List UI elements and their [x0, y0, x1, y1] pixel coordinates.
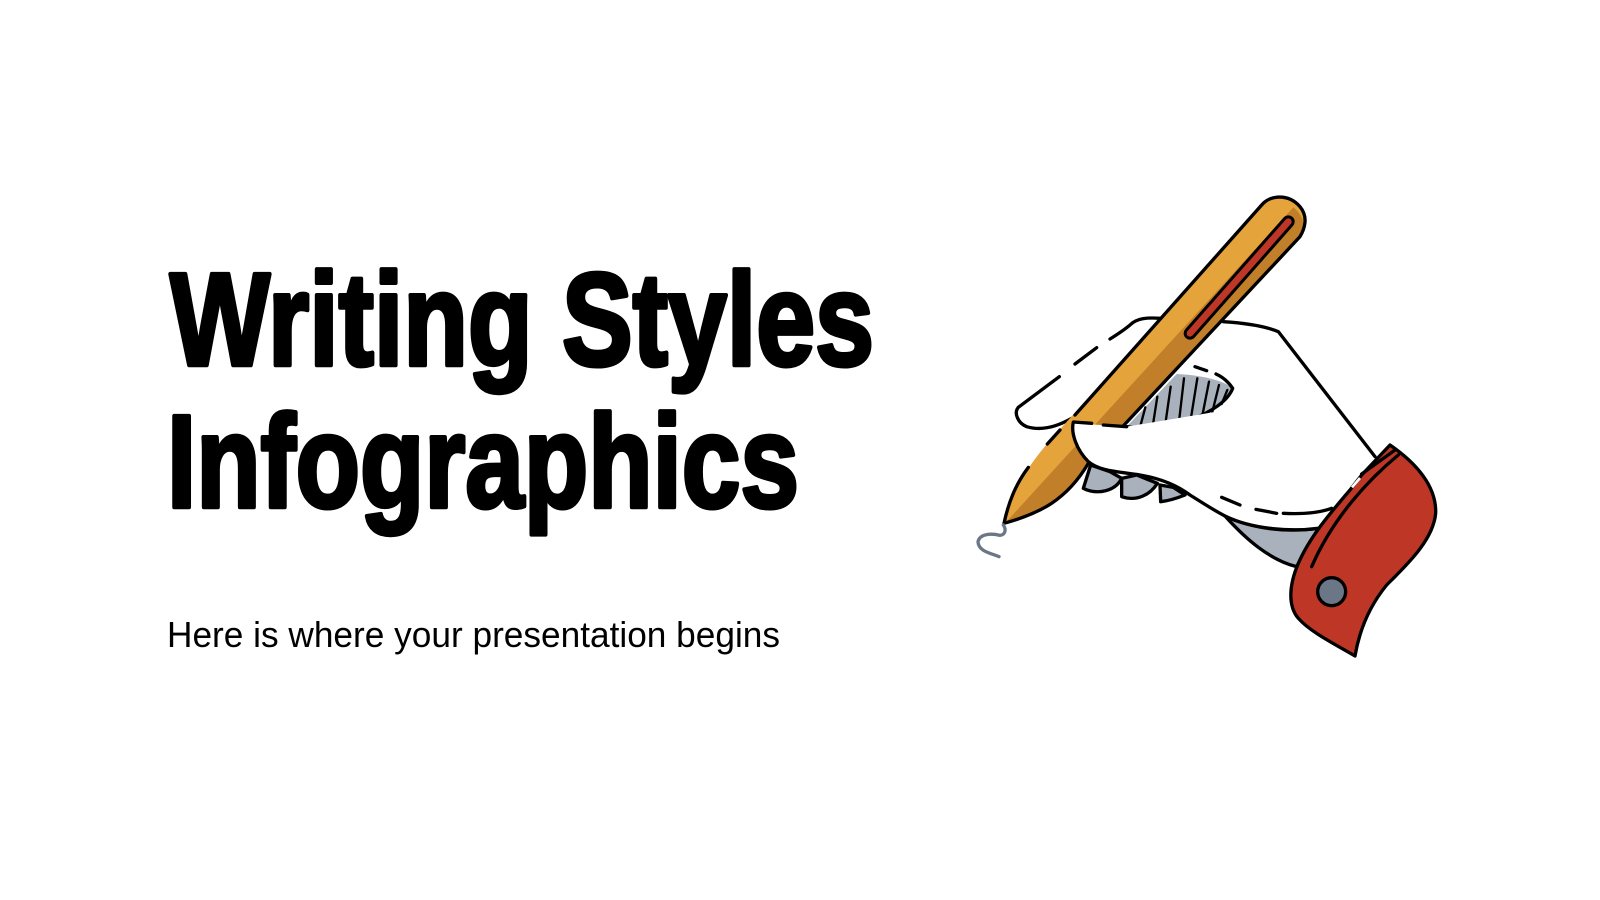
icon: hand back and fingers: [1016, 318, 1377, 530]
title: Writing Styles: [170, 246, 874, 393]
title: [167, 246, 874, 535]
icon: red cuff: [1291, 445, 1436, 656]
icon: hatched gap between fingers: [1127, 367, 1233, 429]
icon: cuff button: [1318, 578, 1346, 606]
icon: pen clip: [1190, 222, 1288, 333]
subtitle: Here is where your presentation begins: [167, 614, 780, 655]
title: Infographics: [167, 388, 799, 535]
icon: thumb: [1073, 410, 1332, 530]
icon: pen: [1004, 197, 1305, 523]
icon: ink squiggle: [978, 525, 1005, 557]
illustration: hand holding pen: [978, 197, 1436, 656]
icon: curled fingers: [1083, 465, 1185, 502]
icon: palm shadow: [1225, 516, 1318, 567]
